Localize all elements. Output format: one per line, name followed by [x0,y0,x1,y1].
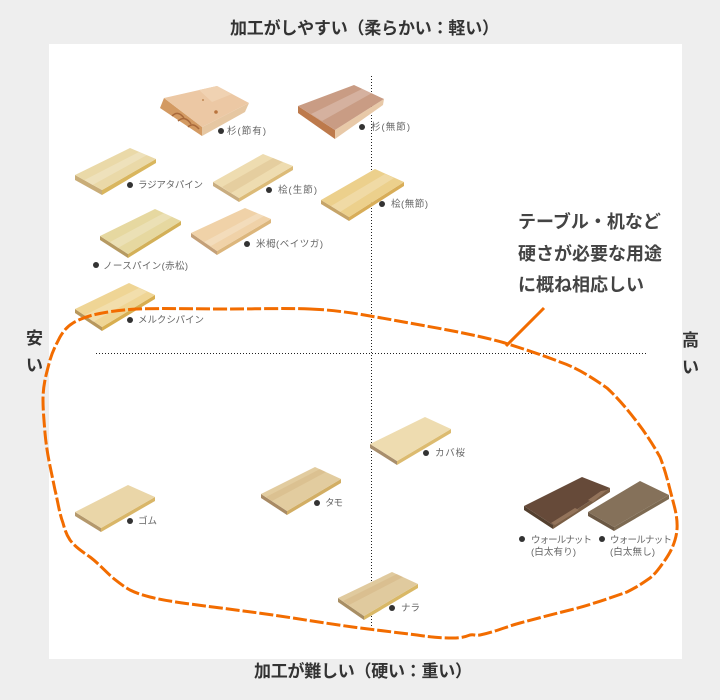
board: タモ: タモ [325,498,343,509]
board: 桧(生節) [213,154,317,202]
callout pointer line [506,308,544,346]
board: タモ [261,467,343,515]
board: ウォールナット(白太有り) [519,477,610,558]
board: メルクシパイン [75,283,204,331]
board: ラジアタパイン: ラジアタパイン [138,180,203,191]
board: 桧(無節) [321,169,428,221]
board: ウォールナット(白太有り): (白太有り) [531,546,576,558]
callout text: テーブル・机など [518,211,661,232]
board: ノースパイン(赤松): ノースパイン(赤松) [103,260,188,272]
callout text [518,211,662,295]
dashed region outline [43,309,677,638]
right axis label: 高 [682,330,699,350]
left axis label: い [26,356,43,375]
board: メルクシパイン: メルクシパイン [138,315,204,326]
board: 杉(無節): 杉(無節) [371,121,410,133]
right axis label [682,330,699,377]
board: カバ桜 [370,417,465,465]
callout text: に概ね相応しい [518,275,644,295]
board: 桧(生節): 桧(生節) [278,184,317,196]
left axis label [26,329,43,375]
board: ウォールナット(白太有り): ウォールナット [531,535,592,546]
board: ナラ [338,572,420,620]
board: ナラ: ナラ [401,603,420,614]
horizontal axis [96,352,646,354]
vertical axis [370,76,372,628]
board: ウォールナット(白太無し): (白太無し) [610,546,655,558]
background panel [49,44,682,659]
board: カバ桜: カバ桜 [435,447,465,459]
board: ウォールナット(白太無し): ウォールナット [610,535,672,546]
board: 米栂(ベイツガ): 米栂(ベイツガ) [256,238,323,250]
board: ノースパイン(赤松) [93,209,188,272]
board: 杉(節有) [160,86,266,137]
board: 米栂(ベイツガ) [191,208,323,255]
top axis heading: 加工がしやすい（柔らかい：軽い） [230,18,499,38]
right axis label: い [682,358,699,377]
left axis label: 安 [26,329,43,348]
board: ウォールナット(白太無し) [588,481,672,558]
callout text: 硬さが必要な用途 [518,243,662,264]
board: ラジアタパイン [75,148,203,195]
board: ゴム: ゴム [138,515,157,527]
board: 杉(無節) [298,85,410,139]
board: 杉(節有): 杉(節有) [227,125,266,137]
board: 桧(無節): 桧(無節) [391,198,428,210]
bottom axis heading: 加工が難しい（硬い：重い） [254,661,472,681]
board: ゴム [75,485,157,532]
